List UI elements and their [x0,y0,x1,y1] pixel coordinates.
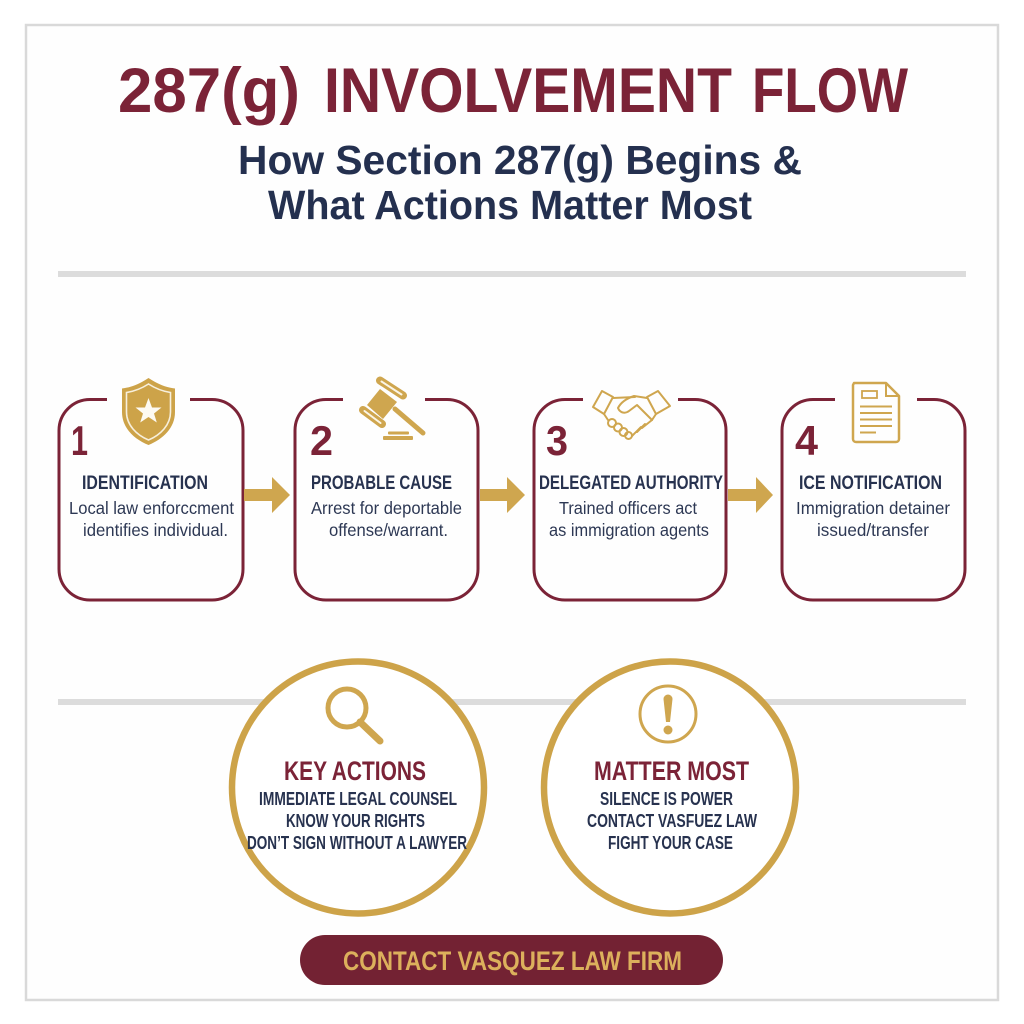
action list [247,788,467,853]
arrow 2 to 3 [480,477,525,513]
step 1: identification [59,378,243,600]
heading: MATTER MOST [594,756,749,786]
subtitle: How Section 287(g) Begins & [238,137,802,183]
step number 4: 4 [795,417,819,464]
priority list [587,788,757,853]
step description [311,498,462,540]
step description: issued/transfer [817,520,929,540]
priority list: CONTACT VASFUEZ LAW [587,810,757,831]
step 2: probable cause [295,380,478,600]
call to action button [300,935,723,985]
step description: Trained officers act [559,498,697,518]
step number 3: 3 [546,417,568,464]
step heading: DELEGATED AUTHORITY [539,472,723,494]
panel: matter most [544,662,796,914]
icon: gavel [363,380,423,440]
icon: document [853,383,899,442]
title: 287(g) [118,56,300,126]
call to action button: CONTACT VASQUEZ LAW FIRM [343,946,682,976]
action list: IMMEDIATE LEGAL COUNSEL [259,788,457,809]
step 3: delegated authority [534,391,726,600]
step heading: PROBABLE CAUSE [311,472,452,494]
arrow 3 to 4 [728,477,773,513]
step description [549,498,709,540]
title: FLOW [752,56,908,126]
action list: KNOW YOUR RIGHTS [286,810,425,831]
step heading: ICE NOTIFICATION [799,472,942,494]
step description: as immigration agents [549,520,709,540]
title: INVOLVEMENT [324,56,732,126]
step description: identifies individual. [83,520,228,540]
step number 2: 2 [310,417,333,464]
step description: Local law enforccment [69,498,234,518]
subtitle: What Actions Matter Most [268,182,752,228]
step description: Arrest for deportable [311,498,462,518]
arrow 1 to 2 [244,477,290,513]
panel: key actions [232,662,484,914]
icon: exclamation in circle [640,686,696,742]
step description: offense/warrant. [329,520,448,540]
step heading: IDENTIFICATION [82,472,208,494]
priority list: SILENCE IS POWER [600,788,733,809]
step description [69,498,234,540]
step description [796,498,950,540]
heading: KEY ACTIONS [284,756,426,786]
priority list: FIGHT YOUR CASE [608,832,733,853]
action list: DON’T SIGN WITHOUT A LAWYER [247,832,467,853]
title [118,56,908,126]
icon: handshake [593,391,670,439]
subtitle [238,137,802,228]
step number 1: 1 [71,417,88,464]
step description: Immigration detainer [796,498,950,518]
icon: shield with star [122,378,175,445]
step 4: ice notification [782,383,965,600]
icon: magnifying glass [328,689,380,741]
